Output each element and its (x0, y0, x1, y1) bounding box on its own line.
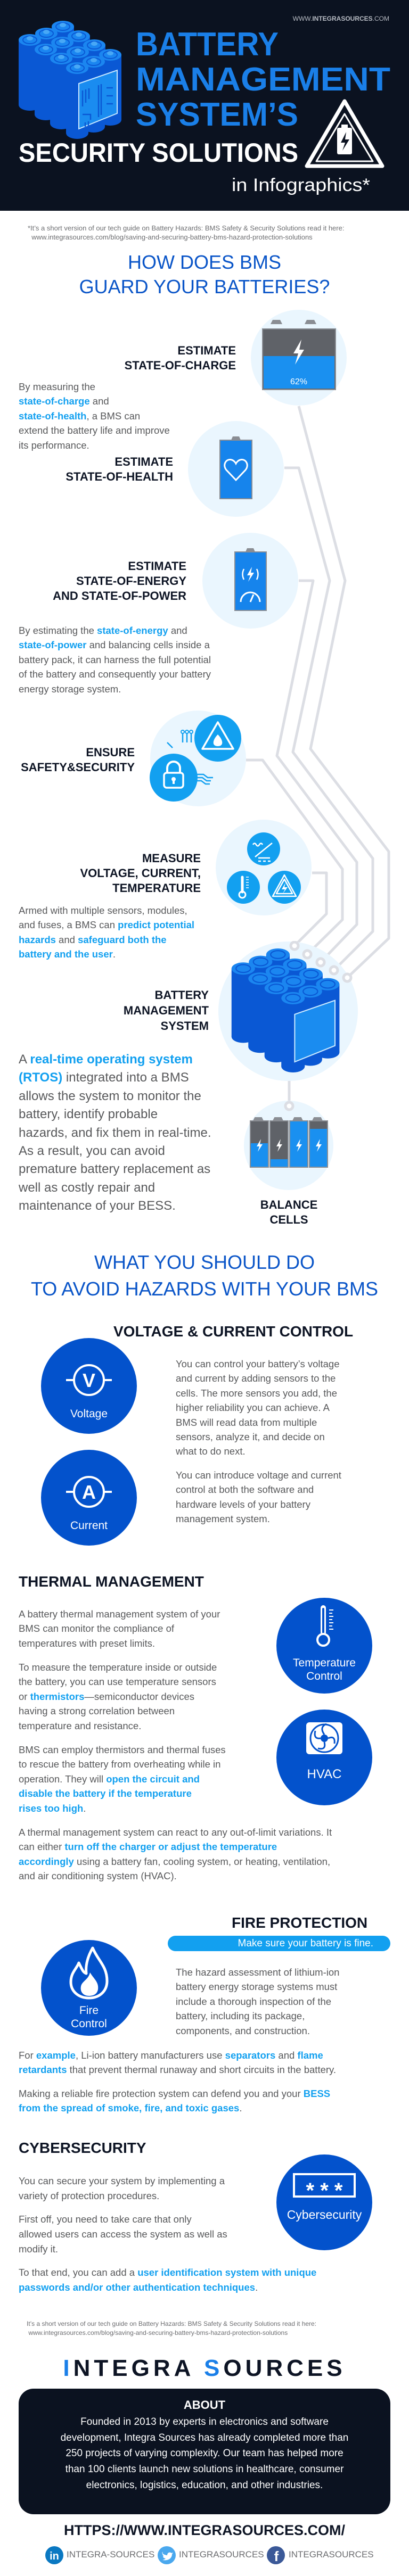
title: in Infographics* (232, 175, 370, 195)
text: RTOS paragraph: maintenance of your BESS. (19, 1199, 176, 1213)
icon: lock and fire warning (150, 711, 246, 806)
section: thermal management (19, 1573, 372, 1881)
text: voltage body: cells. The more sensors you add, the (176, 1388, 337, 1399)
heading: estimate state-of-energy: STATE-OF-ENERGY (76, 574, 186, 588)
text: thermal para 3: operation. They will open the circuit and (19, 1773, 200, 1785)
text: about body: 250 projects of varying complexity. Our team has helped more (66, 2448, 343, 2459)
icon: battery heart (188, 421, 284, 517)
text: voltage body 2: hardware levels of your battery (176, 1499, 310, 1510)
icon: battery 62%: 62% (290, 377, 307, 386)
icon: linkedin: in (50, 2550, 59, 2562)
text: RTOS paragraph: A real-time operating system (19, 1052, 193, 1067)
footer source note: www.integrasources.com/blog/saving-and-securing-battery-bms-hazard-protection-solutions (28, 2329, 288, 2336)
text: thermal para 3: rises too high. (19, 1803, 86, 1814)
text: voltage body 2 (176, 1469, 341, 1524)
icon: current circle (41, 1450, 137, 1546)
text: fire body: components, and construction. (176, 2025, 310, 2036)
text: thermal para 2: To measure the temperature inside or outside (19, 1662, 217, 1673)
text: voltage body: higher reliability you can achieve. A (176, 1402, 330, 1413)
icon: temperature control: Temperature (293, 1657, 356, 1669)
text: fire example (19, 2048, 336, 2077)
text: state of charge body: extend the battery life and improve (19, 425, 170, 436)
icon: warning triangle with battery (307, 101, 382, 166)
text: voltage body: BMS will read data from multiple (176, 1417, 317, 1428)
text: RTOS paragraph: hazards, and fix them in real-time. (19, 1126, 211, 1140)
website url: HTTPS://WWW.INTEGRASOURCES.COM/ (64, 2522, 345, 2538)
text: thermal para 3: to rescue the battery from overheating while in (19, 1758, 220, 1770)
icon: HVAC: HVAC (307, 1767, 341, 1781)
panel: estimate state-of-charge (19, 310, 347, 451)
text: energy body: energy storage system. (19, 683, 121, 695)
text: cyber para 3: To that end, you can add a user identification system with unique (19, 2267, 316, 2278)
footer source note: It’s a short version of our tech guide on Battery Hazards: BMS Safety & Security Solutions read it here: (27, 2320, 316, 2327)
text: thermal para 1: A battery thermal management system of your (19, 1608, 220, 1620)
icon: fire control: Control (71, 2018, 107, 2030)
heading: thermal management: THERMAL MANAGEMENT (19, 1573, 204, 1590)
text: energy body (19, 625, 211, 695)
panel: ensure safety & security (21, 711, 246, 806)
heading: ensure safety & security: ENSURE (86, 746, 135, 759)
text: cyber para 1: variety of protection procedures. (19, 2190, 159, 2201)
source note: www.integrasources.com/blog/saving-and-securing-battery-bms-hazard-protection-solutions (31, 233, 313, 241)
text: state of charge body (19, 381, 170, 451)
text: fire body (176, 1965, 339, 2038)
heading: about: ABOUT (184, 2398, 225, 2412)
heading: estimate state-of-health: STATE-OF-HEALTH (66, 470, 173, 483)
text: RTOS paragraph: battery, identify probable (19, 1107, 158, 1121)
logo: integra sources: INTEGRA SOURCES (63, 2355, 346, 2381)
text: thermal para 1: temperatures with preset limits. (19, 1638, 155, 1649)
text: thermal para 1: BMS can monitor the compliance of (19, 1623, 174, 1634)
text: RTOS paragraph: well as costly repair and (19, 1180, 155, 1195)
heading: balance cells (260, 1198, 317, 1226)
icon: cybersecurity password: Cybersecurity (287, 2208, 362, 2222)
icon: facebook: f (274, 2548, 279, 2564)
text: energy body: By estimating the state-of-energy and (19, 625, 187, 636)
heading: how does BMS guard: HOW DOES BMS (128, 251, 281, 273)
text: fire body: battery, including its package, (176, 2010, 305, 2021)
text: measure body: and fuses, a BMS can predict potential (19, 919, 194, 930)
heading: estimate state-of-energy: ESTIMATE (128, 559, 186, 573)
text: energy body: battery pack, it can harness the full potential (19, 654, 211, 665)
text: facebook handle: INTEGRASOURCES (289, 2549, 374, 2560)
icon: current circle: A (82, 1481, 96, 1503)
icon: fire control: Fire (79, 2004, 99, 2017)
callout pill: Make sure your battery is fine. (238, 1938, 373, 1949)
text: cyber para 2: modify it. (19, 2243, 58, 2255)
heading: battery management system: SYSTEM (161, 1019, 209, 1033)
heading: estimate state-of-charge: STATE-OF-CHARGE (125, 359, 236, 372)
text: thermal para 3: disable the battery if the temperature (19, 1788, 192, 1799)
text: linkedin handle: INTEGRA-SOURCES (67, 2549, 154, 2560)
heading: what you should do (31, 1251, 378, 1300)
heading: estimate state-of-health: ESTIMATE (114, 455, 173, 468)
panel: about (19, 2389, 390, 2514)
text: measure body (19, 905, 194, 960)
text: RTOS paragraph: premature battery replacement as (19, 1162, 210, 1176)
text: cyber para 2 (19, 2212, 227, 2257)
icon: fire control (40, 1939, 137, 2036)
heading: estimate state-of-energy (53, 559, 186, 602)
text: voltage body: sensors, analyze it, and decide on (176, 1431, 325, 1442)
panel: measure voltage current temperature (19, 820, 312, 960)
heading: what you should do: WHAT YOU SHOULD DO (94, 1251, 315, 1273)
heading: measure voltage current temperature: TEMPERATURE (112, 881, 201, 895)
text: RTOS paragraph: allows the system to monitor the (19, 1089, 201, 1103)
text: cyber para 1: You can secure your system by implementing a (19, 2175, 225, 2186)
icon: linkedin (45, 2546, 64, 2565)
heading: estimate state-of-charge (125, 344, 236, 372)
icon: HVAC (276, 1710, 372, 1805)
title (19, 26, 390, 195)
icon: voltage circle (41, 1338, 137, 1434)
icon: sensors trio (216, 820, 312, 915)
icon: battery energy gauge (202, 533, 298, 629)
text: cyber para 1 (19, 2174, 225, 2203)
text: about body: development, Integra Sources has already completed more than (61, 2432, 348, 2443)
heading: measure voltage current temperature: VOLTAGE, CURRENT, (80, 866, 201, 880)
text: RTOS paragraph (19, 1052, 211, 1213)
text: fire body: battery energy storage systems must (176, 1981, 337, 1992)
heading: how does BMS guard: GUARD YOUR BATTERIES? (79, 276, 330, 298)
heading: battery management system: MANAGEMENT (124, 1004, 209, 1017)
icon: temperature control: Control (306, 1670, 342, 1682)
icon: voltage circle: Voltage (70, 1408, 108, 1420)
text: about body: electronics, logistics, education, and other industries. (86, 2480, 323, 2491)
callout pill (168, 1936, 390, 1951)
circuit lines (246, 406, 390, 1101)
icon: twitter (157, 2546, 176, 2565)
heading: what you should do: TO AVOID HAZARDS WITH YOUR BMS (31, 1278, 378, 1300)
section: cybersecurity (0, 2137, 409, 2297)
panel: balance cells (244, 1101, 333, 1226)
text: energy body: of the battery and consequently your battery (19, 668, 211, 680)
text: state of charge body: state-of-health, a BMS can (19, 410, 140, 422)
text: cyber para 3 (19, 2265, 316, 2295)
text: thermal para 2 (19, 1662, 217, 1731)
icon: cybersecurity password (276, 2154, 373, 2251)
text: fire body: The hazard assessment of lithium-ion (176, 1967, 339, 1978)
text: RTOS paragraph: As a result, you can avoid (19, 1144, 165, 1158)
heading: cybersecurity: CYBERSECURITY (19, 2140, 146, 2156)
text: thermal para 2: the battery, you can use temperature sensors (19, 1676, 216, 1687)
title: SECURITY SOLUTIONS (19, 138, 298, 168)
text: cyber para 2: First off, you need to take care that only (19, 2214, 192, 2225)
text: state of charge body: state-of-charge and (19, 395, 109, 407)
heading: voltage & current control: VOLTAGE & CURRENT CONTROL (113, 1323, 353, 1340)
text: voltage body 2: control at both the software and (176, 1484, 314, 1495)
title: SYSTEM’S (136, 96, 298, 133)
text: thermal para 3 (19, 1744, 226, 1814)
heading: estimate state-of-charge: ESTIMATE (177, 344, 236, 357)
text: thermal para 2: having a strong correlation between (19, 1705, 175, 1716)
text: cyber para 2: allowed users can access the system as well as (19, 2228, 227, 2240)
text: voltage body: what to do next. (176, 1446, 246, 1457)
text: state of charge body: its performance. (19, 440, 89, 451)
text: fire conclusion: from the spread of smoke, fire, and toxic gases. (19, 2102, 242, 2113)
text: fire example: For example, Li-ion battery manufacturers use separators and flame (19, 2050, 323, 2061)
text: voltage body: You can control your battery’s voltage (176, 1358, 340, 1369)
text: thermal para 4: can either turn off the charger or adjust the temperature (19, 1841, 277, 1852)
section: fire protection (0, 1911, 409, 2118)
title: MANAGEMENT (136, 61, 390, 98)
text: thermal para 4 (19, 1825, 332, 1884)
heading: measure voltage current temperature: MEASURE (142, 852, 201, 865)
text: thermal para 2: temperature and resistance. (19, 1720, 141, 1731)
text: fire body: include a thorough inspection of the (176, 1996, 331, 2007)
text: RTOS paragraph: (RTOS) integrated into a BMS (19, 1070, 189, 1085)
footer source note (27, 2319, 316, 2338)
panel: battery management system (124, 941, 358, 1081)
text: cyber para 3: passwords and/or other authentication techniques. (19, 2282, 258, 2293)
text: voltage body 2: management system. (176, 1513, 270, 1524)
text: fire conclusion (19, 2086, 330, 2116)
icon: voltage circle: V (83, 1369, 95, 1391)
text: energy body: state-of-power and balancing cells inside a (19, 639, 210, 650)
text: thermal para 1 (19, 1608, 220, 1649)
heading: measure voltage current temperature (80, 852, 201, 895)
heading: fire protection: FIRE PROTECTION (232, 1914, 367, 1931)
text: measure body: hazards and safeguard both the (19, 934, 167, 945)
text: thermal para 4: and air conditioning system (HVAC). (19, 1870, 177, 1881)
text: voltage body 2: You can introduce voltage and current (176, 1469, 341, 1481)
text: measure body: battery and the user. (19, 948, 116, 960)
source note (28, 224, 344, 241)
social links (0, 2546, 409, 2565)
text: state of charge body: By measuring the (19, 381, 95, 392)
heading: ensure safety & security (21, 746, 135, 774)
icon: battery 62% (251, 310, 347, 406)
icon: BMS battery stack (218, 941, 358, 1081)
text: thermal para 2: or thermistors—semiconductor devices (19, 1691, 194, 1702)
text: measure body: Armed with multiple sensors, modules, (19, 905, 187, 916)
heading: balance cells: BALANCE (260, 1198, 317, 1211)
text: thermal para 3: BMS can employ thermistors and thermal fuses (19, 1744, 226, 1755)
heading: battery management system (124, 988, 209, 1033)
text: thermal para 4: accordingly using a battery fan, cooling system, or heating, ventilation, (19, 1856, 330, 1867)
text: voltage body (176, 1358, 340, 1457)
text: about body: than 100 clients launch new solutions in healthcare, consumer (66, 2464, 343, 2475)
heading: battery management system: BATTERY (155, 988, 209, 1002)
heading: how does BMS guard (79, 251, 330, 298)
icon: battery stack (19, 21, 121, 139)
text: about body: Founded in 2013 by experts in electronics and software (80, 2416, 329, 2428)
icon: temperature control (276, 1598, 372, 1694)
heading: estimate state-of-health (66, 455, 173, 483)
text: voltage body: and current by adding sensors to the (176, 1373, 336, 1384)
website label: WWW.INTEGRASOURCES.COM (293, 15, 389, 22)
panel: estimate state-of-energy and power (19, 533, 298, 695)
icon: cybersecurity password: * * * (306, 2179, 343, 2202)
heading: balance cells: CELLS (269, 1213, 308, 1226)
icon: balancing cells (244, 1101, 333, 1190)
icon: current circle: Current (70, 1520, 108, 1532)
title: BATTERY (136, 26, 279, 63)
icon: facebook (266, 2546, 285, 2565)
source note: *It’s a short version of our tech guide on Battery Hazards: BMS Safety & Security Solutions read it here: (28, 224, 344, 232)
section: voltage & current control (41, 1323, 353, 1546)
heading: ensure safety & security: SAFETY&SECURITY (21, 761, 135, 774)
text: about body (19, 2414, 390, 2494)
header banner (0, 0, 409, 211)
heading: estimate state-of-energy: AND STATE-OF-POWER (53, 589, 186, 602)
text: thermal para 4: A thermal management system can react to any out-of-limit variations. It (19, 1827, 332, 1838)
text: fire example: retardants that prevent thermal runaway and short circuits in the battery. (19, 2064, 336, 2075)
text: twitter handle: INTEGRASOURCES (179, 2549, 264, 2560)
panel: estimate state-of-health (66, 421, 284, 517)
text: fire conclusion: Making a reliable fire protection system can defend you and your BESS (19, 2088, 330, 2099)
